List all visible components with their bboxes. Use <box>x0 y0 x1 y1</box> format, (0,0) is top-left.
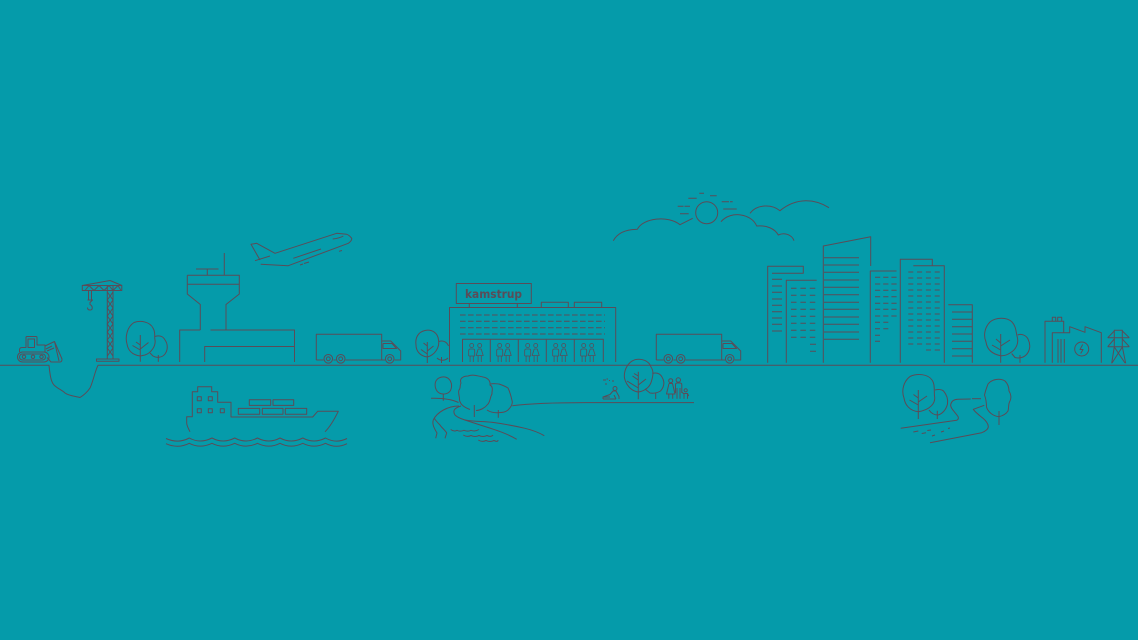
clouds <box>613 201 829 241</box>
kamstrup sign: kamstrup <box>465 287 522 301</box>
tree pair by factory <box>416 330 448 363</box>
factory window rows <box>460 315 605 334</box>
city skyline <box>768 237 972 363</box>
family of three <box>666 378 689 399</box>
building B <box>786 280 817 363</box>
park tree pair <box>624 359 664 399</box>
icon: tower crane <box>82 280 122 361</box>
building E <box>900 259 944 363</box>
icon: cargo ship <box>166 387 347 446</box>
Kamstrup factory building <box>450 302 616 362</box>
river ripples <box>451 430 479 431</box>
winding path <box>901 399 971 428</box>
icon: sun <box>678 193 737 224</box>
water waves <box>166 438 347 441</box>
river with trees <box>431 375 694 442</box>
icon: excavator <box>18 336 62 362</box>
tree pair by power plant <box>985 318 1030 363</box>
factory workers <box>469 344 595 362</box>
icon: delivery truck right <box>656 334 741 363</box>
airport control tower <box>180 253 294 362</box>
building A <box>768 266 803 363</box>
icon: airplane <box>251 233 352 266</box>
icon: delivery truck left <box>316 334 401 363</box>
park tree pair with path <box>901 374 988 443</box>
tree pair by crane <box>126 321 167 362</box>
icon: electricity pylon <box>1108 330 1129 363</box>
building F <box>948 305 972 363</box>
person sitting on grass <box>603 379 619 399</box>
building C <box>823 237 871 363</box>
icon: power plant <box>1045 317 1101 363</box>
ground line with excavation pit <box>0 365 1138 398</box>
kamstrup sign <box>456 284 531 304</box>
building D <box>870 271 896 363</box>
tree by path <box>984 379 1011 425</box>
